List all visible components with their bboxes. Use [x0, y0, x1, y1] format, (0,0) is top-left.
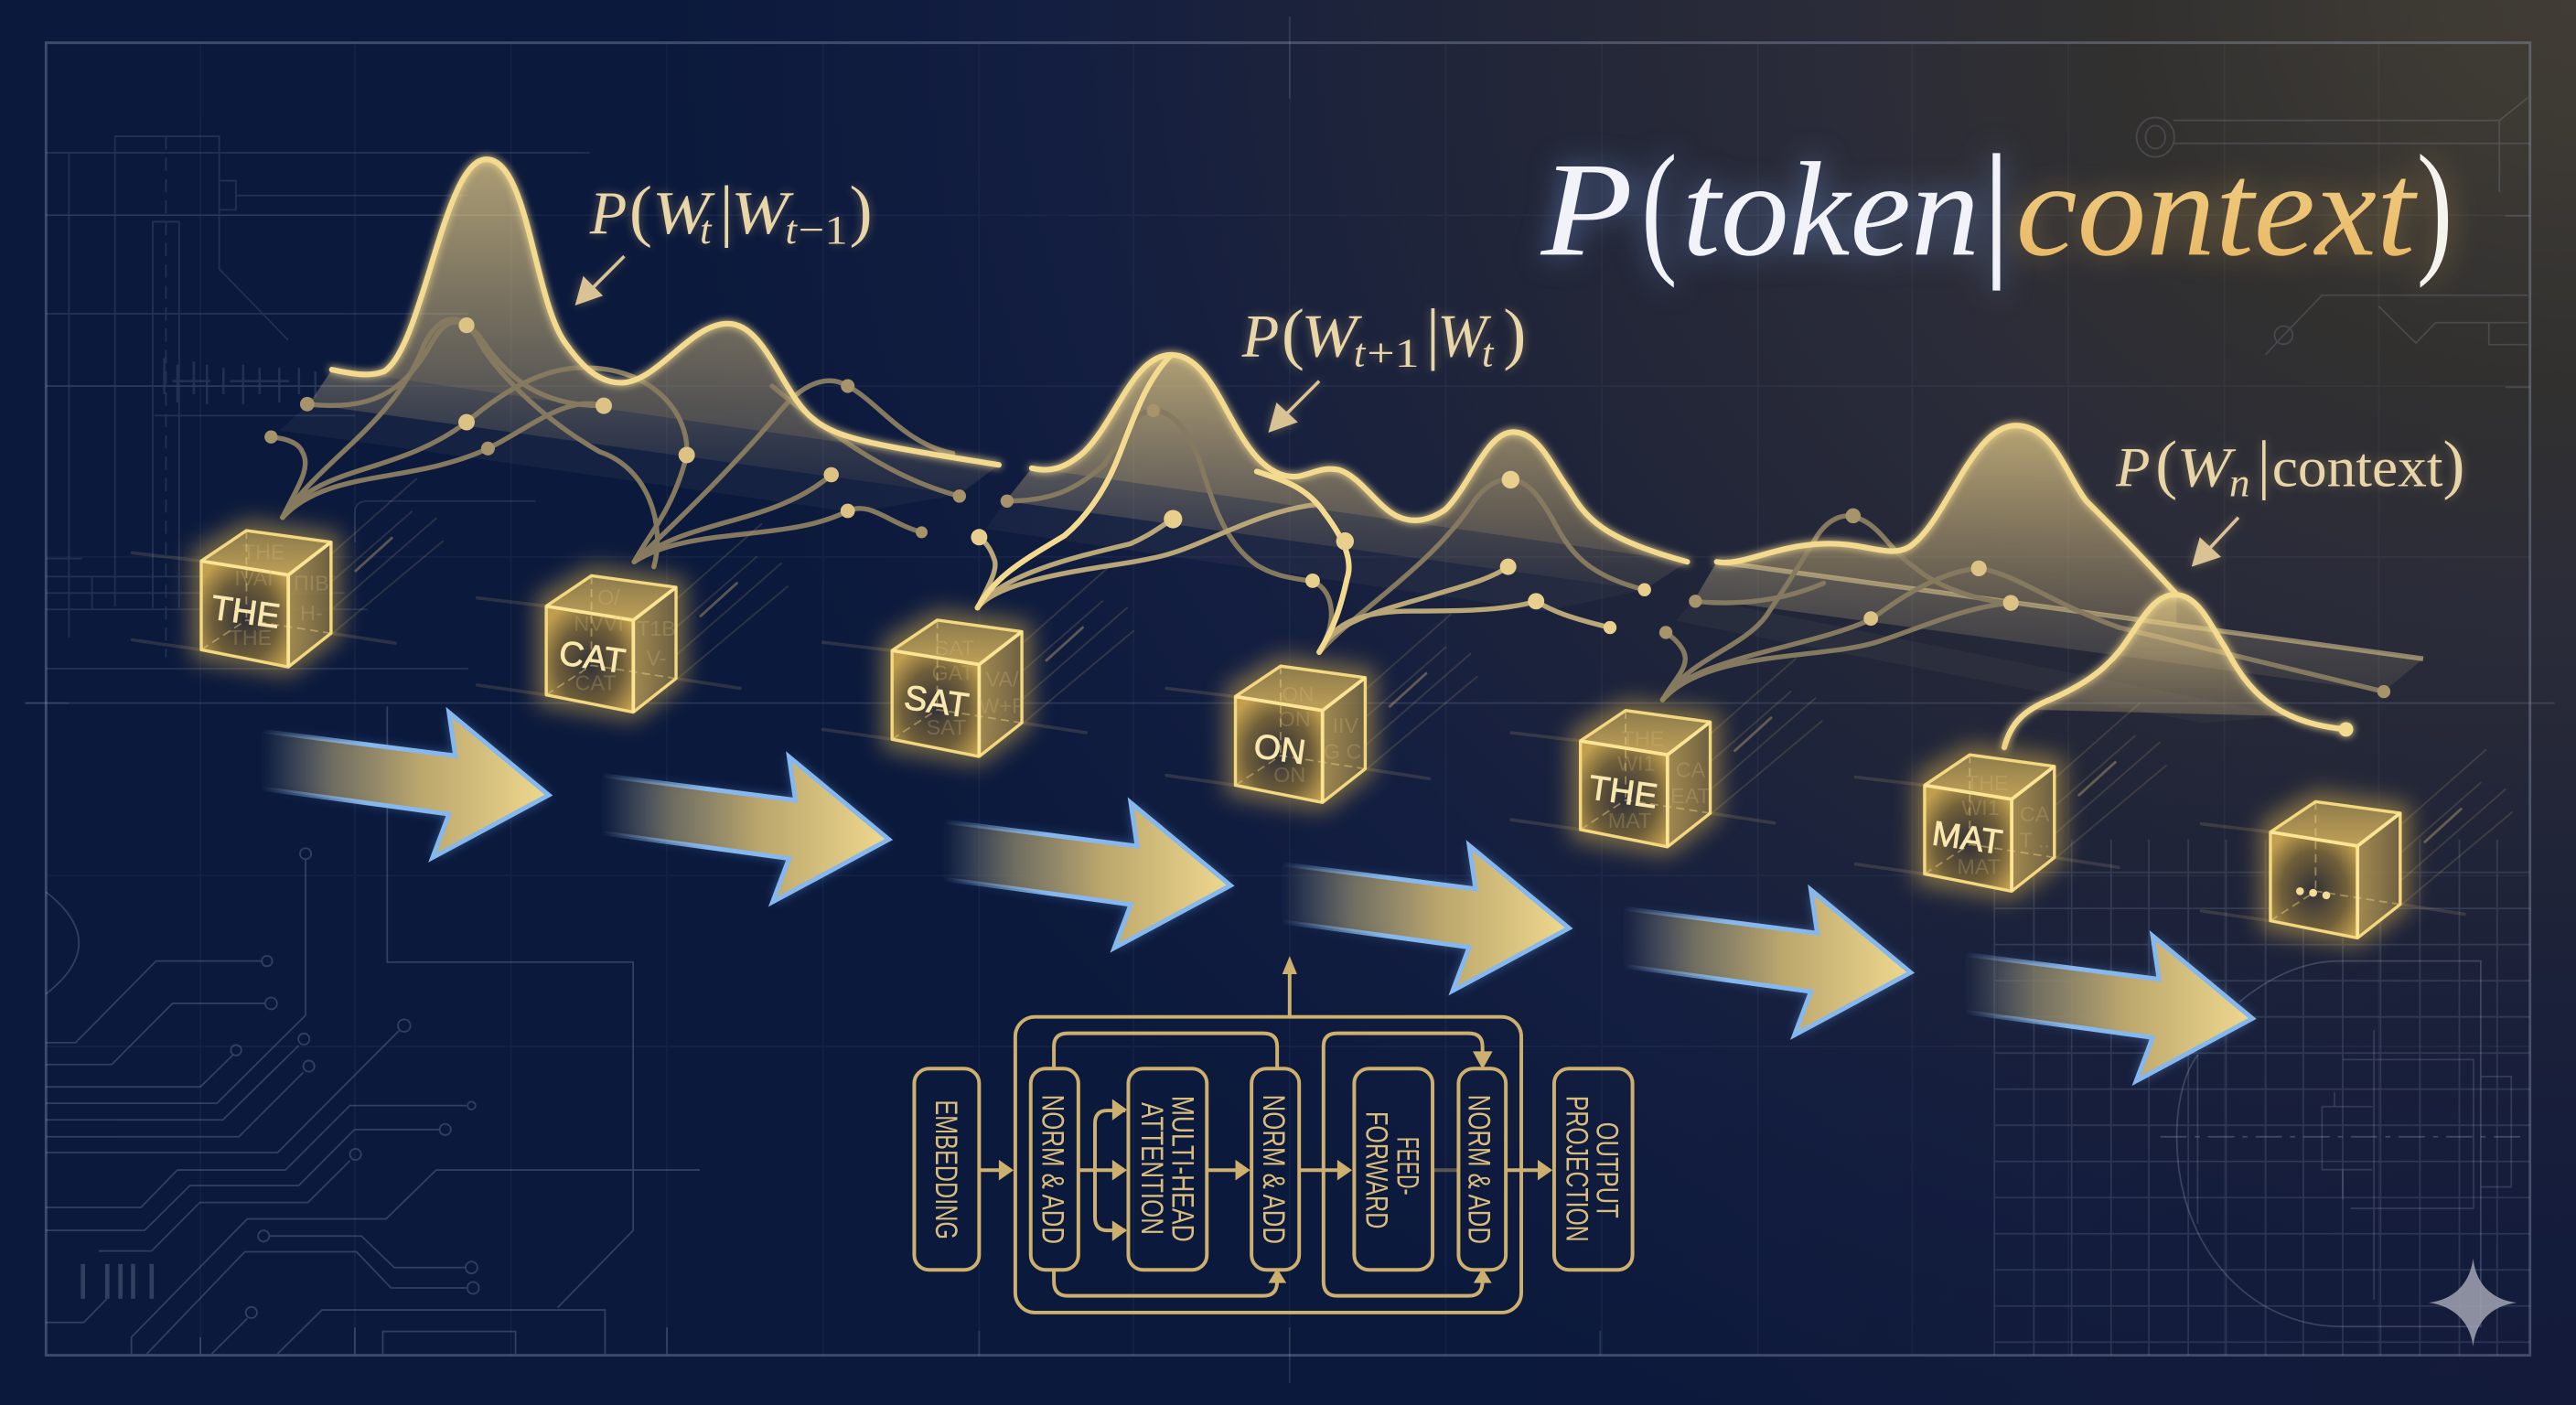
- token cube: THE: [133, 479, 443, 676]
- skip connections: [1054, 1034, 1493, 1296]
- distribution area 3: [1717, 425, 2177, 624]
- flow arrow 6: [1965, 936, 2252, 1081]
- formula label 3 with pointer: (: [2155, 428, 2177, 501]
- token cube: ON: ON: [1273, 763, 1305, 787]
- bottom-left circuit traces: [46, 706, 700, 1354]
- formula label 3 with pointer: ): [2443, 428, 2464, 501]
- title: P(token| in white: [1540, 123, 2012, 291]
- formula label 2 with pointer: W: [1437, 304, 1492, 370]
- token cube: CAT: V-: [646, 646, 666, 670]
- bottom-right grid and machine drawing: [1994, 840, 2530, 1356]
- block: norm and add 1: NORM & ADD: [1036, 1095, 1070, 1244]
- flow arrow 2: [601, 756, 889, 902]
- formula label 1 with pointer: ): [849, 173, 873, 249]
- block: feed-forward: FORWARD: [1358, 1111, 1393, 1228]
- ribbon baseline 3: [1695, 562, 2423, 692]
- formula label 3 with pointer: P: [2115, 438, 2150, 499]
- token cube: THE (second): EAT: [1670, 784, 1711, 808]
- block: norm and add 1: [1031, 1068, 1079, 1270]
- formula label 1 with pointer: P: [589, 180, 627, 247]
- token cube: MAT: T ..: [2020, 829, 2050, 853]
- block: norm and add 2: [1251, 1068, 1299, 1270]
- distribution area 4: [2034, 595, 2291, 716]
- token cube: CAT: T1B: [637, 617, 676, 640]
- ribbon top edge 3: [1717, 562, 2423, 659]
- token cube: THE: THE: [230, 626, 272, 649]
- token cube: SAT: [823, 568, 1133, 766]
- distribution area 1: [332, 159, 999, 465]
- token cube: ON: ON: [1282, 682, 1314, 706]
- token cube: THE: THE: [242, 541, 285, 564]
- formula label 1 with pointer: |: [720, 173, 734, 249]
- token cube: THE (second): MAT: [1608, 809, 1651, 832]
- formula label 2 with pointer: t: [1354, 329, 1367, 375]
- formula label 3 with pointer: |: [2258, 428, 2270, 501]
- title: P(token| in white: token: [1682, 134, 1980, 284]
- token cube: CAT: CAT: [557, 633, 628, 681]
- token cube: SAT: SAT: [927, 715, 966, 739]
- formula label 3 with pointer: W: [2177, 438, 2237, 499]
- ribbon shadow 2: [986, 501, 1645, 611]
- formula label 2 with pointer: +1: [1367, 329, 1420, 375]
- flow arrow 4: [1282, 845, 1569, 991]
- formula label 1 with pointer: [575, 173, 873, 306]
- top-right circuit traces: [2137, 98, 2530, 387]
- sparkle star watermark: [2429, 1259, 2517, 1346]
- token cube: MAT: WI1: [1961, 796, 2000, 820]
- formula label 2 with pointer: [1241, 296, 1526, 433]
- token branch curves 1: [264, 317, 966, 567]
- token cube: SAT: SAT: [902, 678, 971, 724]
- token cube: THE: THE: [209, 588, 283, 636]
- ribbon baseline 2: [1005, 468, 1687, 590]
- bright curve 4 with end dot: [2004, 595, 2353, 747]
- block: norm and add 2: NORM & ADD: [1256, 1095, 1291, 1244]
- formula label 1 with pointer: W: [731, 180, 794, 247]
- formula label 2 with pointer: ): [1503, 296, 1526, 372]
- main curve 3: [1717, 425, 2177, 595]
- token cube: MAT: CA: [2020, 802, 2050, 826]
- token cube: THE: ΠIB: [294, 572, 329, 595]
- block: feed-forward: FEED-: [1390, 1137, 1424, 1196]
- token cube: ON: IIV: [1333, 713, 1359, 737]
- token cube: ellipsis: [2202, 750, 2512, 947]
- formula label 1 with pointer: W: [652, 180, 715, 247]
- formula label 1 with pointer: (: [629, 173, 652, 249]
- title: context) in gold: context: [2016, 134, 2418, 284]
- token cube: THE: IVAI: [234, 566, 274, 590]
- flow arrows: [979, 1099, 1552, 1241]
- block: embedding: EMBEDDING: [928, 1099, 963, 1239]
- token cube: MAT: [1855, 703, 2166, 900]
- token cube: CAT: NVVI: [574, 612, 624, 636]
- token branch curves 2: [971, 355, 1651, 652]
- main title formula: [1540, 123, 2453, 291]
- block: output projection: PROJECTION: [1559, 1096, 1594, 1242]
- formula label 1 with pointer: t: [700, 207, 713, 252]
- token cube: ON: ON: [1251, 726, 1308, 771]
- formula label 1 with pointer: t: [785, 207, 798, 252]
- block: output projection: OUTPUT: [1590, 1122, 1625, 1218]
- token cube: THE: H-: [300, 601, 323, 625]
- token cube: ON: [1166, 615, 1477, 811]
- residual wrapper and output arrow: [1015, 956, 1521, 1313]
- block: multi-head attention: [1128, 1068, 1207, 1270]
- title: P(token| in white: (: [1641, 124, 1678, 288]
- block: norm and add 3: NORM & ADD: [1462, 1095, 1497, 1244]
- token branch curves 3: [1659, 509, 2390, 700]
- main curve 1: [332, 159, 999, 465]
- formula label 3 with pointer: [2115, 428, 2464, 567]
- probability cluster 2: [971, 355, 1687, 652]
- title: P(token| in white: P: [1540, 134, 1633, 284]
- ribbon shadow 3: [1676, 598, 2291, 723]
- token cube: THE (second): CA: [1676, 757, 1706, 781]
- formula label 2 with pointer: (: [1282, 296, 1304, 372]
- token cube: MAT: THE: [1966, 771, 2008, 795]
- token cube: THE (second): THE: [1622, 726, 1664, 750]
- token cube: CAT: CAT: [575, 670, 616, 694]
- flow arrow 3: [943, 803, 1230, 948]
- formula label 1 with pointer: −1: [799, 207, 848, 252]
- block: multi-head attention: MULTI-HEAD: [1165, 1096, 1199, 1242]
- token cube: CAT: [478, 524, 788, 721]
- probability cluster 1: [264, 159, 999, 567]
- token cube: MAT: MAT: [1930, 813, 2005, 862]
- block: output projection: [1554, 1068, 1633, 1270]
- main curve 2: [1032, 355, 1687, 562]
- block: norm and add 3: [1458, 1068, 1506, 1270]
- token cube: CAT: O/: [597, 585, 620, 609]
- formula label 2 with pointer: t: [1482, 329, 1495, 375]
- token cube: MAT: MAT: [1957, 854, 2001, 878]
- flow arrow 5: [1623, 890, 1911, 1035]
- formula label 3 with pointer: context: [2272, 438, 2443, 499]
- token cube: SAT: VA/: [986, 668, 1019, 692]
- token cube: THE (second): WI1: [1617, 751, 1655, 775]
- block: embedding: [914, 1068, 979, 1270]
- token cube: ON: ON: [1279, 707, 1311, 731]
- title: P(token| in white: |: [1981, 123, 2012, 291]
- distribution area 2: [1032, 355, 1687, 562]
- block: multi-head attention: ATTENTION: [1134, 1102, 1169, 1235]
- token cube: SAT: GAT: [932, 661, 974, 685]
- token cube: SAT: SAT: [935, 637, 974, 660]
- formula label 3 with pointer: n: [2229, 459, 2249, 505]
- flow arrow 1: [262, 713, 549, 857]
- ribbon baseline 1: [309, 370, 999, 495]
- token cube: THE (second): THE: [1586, 767, 1660, 815]
- transformer block diagram: [914, 956, 1633, 1313]
- block: feed-forward: [1354, 1068, 1433, 1270]
- token cube: THE (second): [1511, 659, 1822, 856]
- formula label 2 with pointer: |: [1426, 296, 1440, 372]
- ribbon shadow 1: [279, 404, 960, 512]
- formula label 2 with pointer: W: [1301, 304, 1363, 370]
- token cube: SAT: W+F: [980, 693, 1025, 717]
- probability cluster 3: [1659, 425, 2423, 747]
- token cube: ON: G CI: [1324, 740, 1368, 764]
- top-left blueprint drawing: [27, 136, 590, 703]
- title: context) in gold: ): [2417, 124, 2453, 288]
- formula label 2 with pointer: P: [1241, 304, 1279, 370]
